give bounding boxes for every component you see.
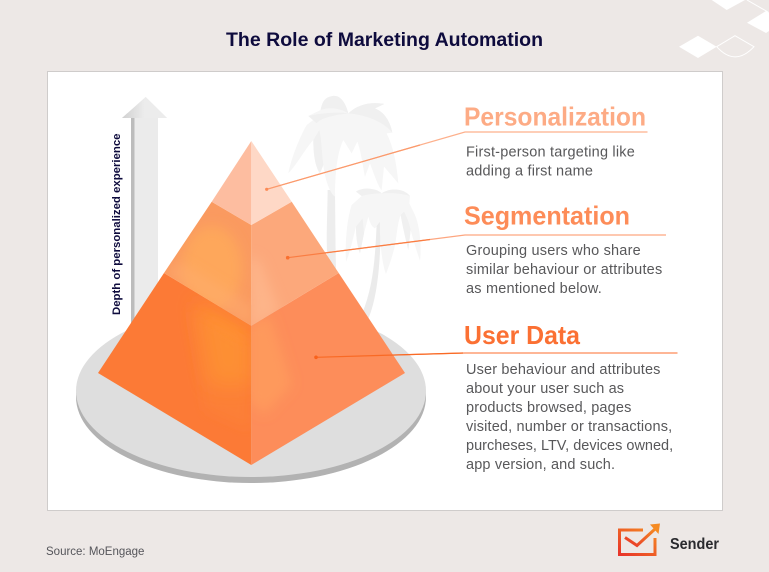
text: user data body: about your user such as (466, 381, 624, 397)
text: user data body: purcheses, LTV, devices owned, (466, 438, 673, 454)
text: segmentation body: Grouping users who share (466, 243, 641, 259)
text: user data body: app version, and such. (466, 457, 615, 473)
text: user data body: products browsed, pages (466, 400, 631, 416)
text: arrow label: Depth of personalized experience (111, 134, 123, 315)
palm trunks (327, 190, 336, 270)
large palm crown (288, 96, 398, 197)
pyramid tier: user data (98, 273, 405, 465)
callout line: user data (314, 353, 678, 359)
text: segmentation body: as mentioned below. (466, 281, 602, 297)
logo: sender (620, 524, 719, 554)
text: user data body: visited, number or transactions, (466, 419, 672, 435)
title: The Role of Marketing Automation (226, 30, 543, 51)
heading: user data: User Data (464, 320, 581, 350)
small palm crown (346, 189, 421, 274)
background decoration: diamonds (679, 0, 769, 58)
pyramid tier: personalization (212, 141, 292, 225)
panel: main card (48, 72, 722, 510)
text: personalization body: adding a first name (466, 164, 593, 180)
text: user data body: User behaviour and attributes (466, 362, 661, 378)
illustration: palm trees (288, 96, 421, 318)
callout line: personalization (265, 132, 648, 191)
icon: depth arrow (122, 97, 167, 345)
pyramid (98, 141, 405, 465)
text: source: Source: MoEngage (46, 546, 144, 558)
icon: envelope with arrow (620, 524, 660, 554)
text: segmentation body: similar behaviour or attributes (466, 262, 662, 278)
disc base (76, 305, 426, 483)
pyramid tier: segmentation (164, 202, 339, 330)
callout line: segmentation (286, 235, 666, 260)
heading: personalization: Personalization (464, 102, 646, 132)
logo wordmark: Sender (670, 536, 719, 553)
text: personalization body: First-person targeting like (466, 144, 635, 160)
heading: segmentation: Segmentation (464, 200, 630, 230)
